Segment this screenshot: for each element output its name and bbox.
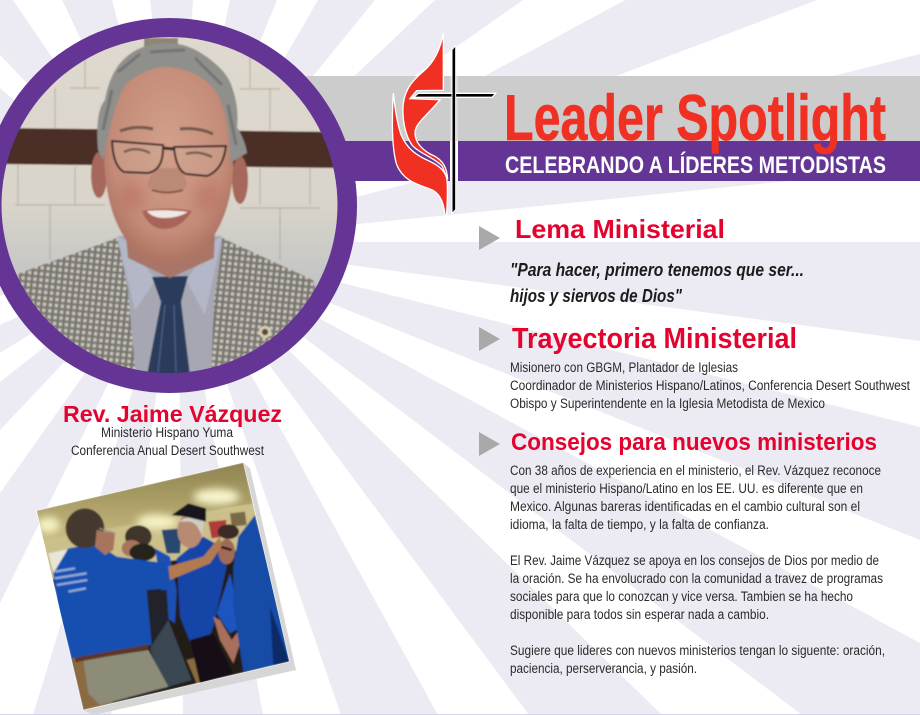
shirt [117, 236, 222, 375]
banner: gray and purple bars [250, 76, 920, 181]
section: Consejos para nuevos ministerios: paciencia, perserverancia, y pasión. [510, 661, 697, 676]
mouth [142, 208, 192, 229]
eyebrows [120, 127, 213, 134]
wall [2, 37, 338, 290]
tie [147, 276, 190, 375]
section: Lema Ministerial: "Para hacer, primero tenemos que ser... [510, 260, 804, 280]
icon: arrow [479, 226, 500, 250]
icon: arrow [479, 432, 500, 456]
ears [91, 152, 107, 198]
section: Consejos para nuevos ministerios: Consejos para nuevos ministerios [511, 429, 877, 456]
section: Lema Ministerial: Lema Ministerial [515, 214, 725, 244]
eyes [124, 149, 212, 157]
hair bun at wall top [143, 37, 179, 48]
section: Trayectoria Ministerial: Trayectoria Ministerial [512, 323, 797, 355]
jacket [18, 238, 316, 344]
brown band [0, 128, 340, 168]
section: Trayectoria Ministerial: Misionero con GBGM, Plantador de Iglesias [510, 360, 738, 375]
Methodist cross and flame logo [392, 33, 496, 223]
face [104, 62, 233, 262]
pin [259, 326, 271, 338]
section: Consejos para nuevos ministerios: disponible para todos sin esperar nada a cambio. [510, 607, 769, 622]
section: Consejos para nuevos ministerios: Mexico. Algunas bareras identificadas en el cambio cultural son el [510, 499, 860, 514]
glasses [112, 141, 226, 176]
nose [147, 168, 187, 192]
icon: left flame [392, 93, 448, 223]
name block: Ministerio Hispano Yuma [101, 425, 233, 440]
section: Lema Ministerial: hijos y siervos de Dios" [510, 286, 682, 306]
icon: cross [413, 46, 496, 213]
section: Trayectoria Ministerial [479, 323, 910, 411]
section: Trayectoria Ministerial: Obispo y Superintendente en la Iglesia Metodista de Mexico [510, 396, 825, 411]
icon: upper flame [403, 33, 448, 180]
section: Consejos para nuevos ministerios: sociales para que lo conozcan y vice versa. Tambien se ha hecho [510, 589, 853, 604]
lapels [132, 340, 136, 369]
name block [63, 401, 282, 458]
section: Consejos para nuevos ministerios: El Rev. Jaime Vázquez se apoya en los consejos de Dios por medio de [510, 553, 879, 568]
section: Consejos para nuevos ministerios [479, 429, 885, 676]
portrait ring and photo [0, 18, 357, 393]
icon: arrow [479, 327, 500, 351]
section: Consejos para nuevos ministerios: que el ministerio Hispano/Latino en los EE. UU. es diferente que en [510, 481, 863, 496]
name block: Conferencia Anual Desert Southwest [71, 443, 264, 458]
section: Consejos para nuevos ministerios: idioma, la falta de tiempo, y la falta de confianza. [510, 517, 769, 532]
section: Lema Ministerial [479, 214, 804, 306]
neck [126, 234, 216, 279]
hair [97, 43, 247, 163]
tilted photo with shadow [37, 463, 296, 715]
name block: Rev. Jaime Vázquez [63, 401, 282, 427]
